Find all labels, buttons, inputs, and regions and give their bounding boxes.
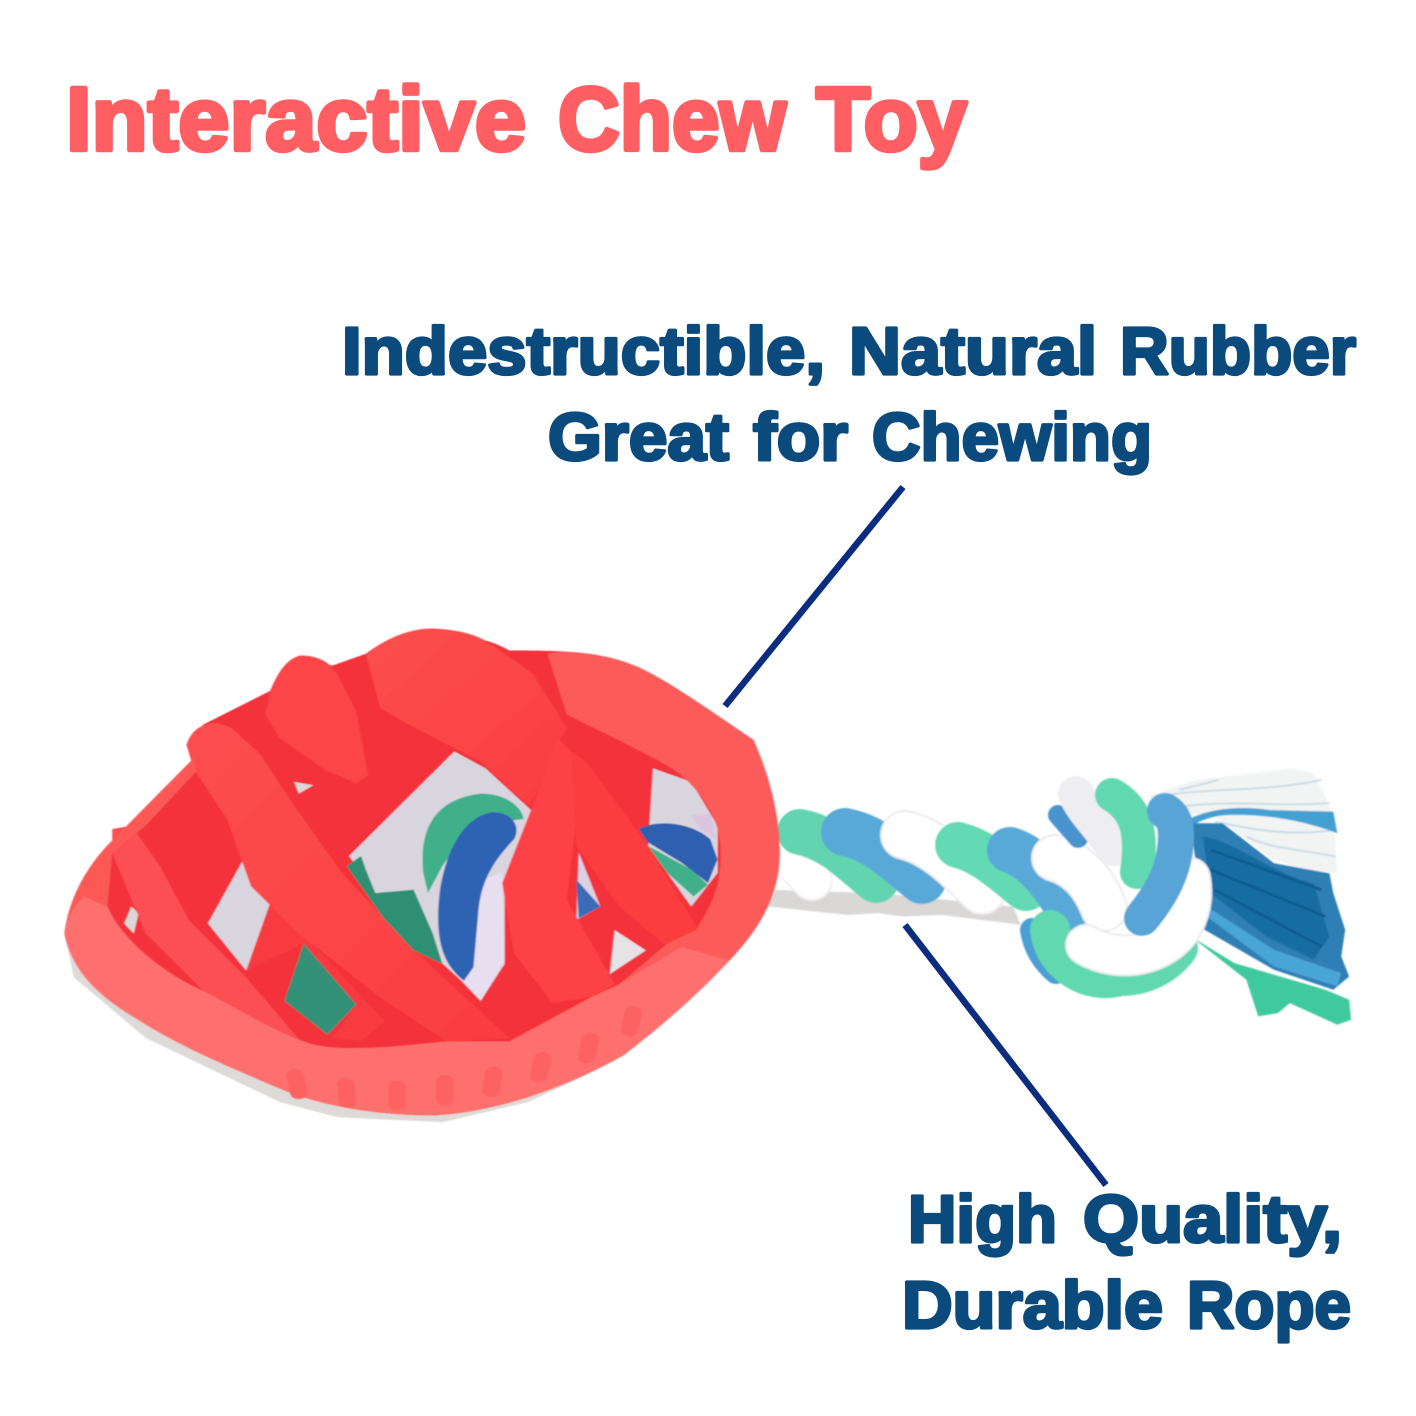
lobe: small <box>265 655 368 784</box>
illustration: rope <box>768 768 1351 1025</box>
title: Toy <box>816 70 967 170</box>
title <box>66 70 967 170</box>
rib: far left <box>112 826 304 1045</box>
inner rope: blue strand <box>438 812 517 981</box>
rim: bottom <box>64 896 729 1116</box>
callout: durable rope: Rope <box>1187 1268 1351 1343</box>
callout: natural rubber: Great <box>548 400 729 475</box>
callout: natural rubber: Rubber <box>1120 314 1356 389</box>
inner rope: right blue strand <box>639 823 718 883</box>
inner rope: green fringe <box>347 856 442 964</box>
rib: centre left <box>186 723 509 1041</box>
window: lower right <box>610 930 646 974</box>
rib: right <box>572 752 698 947</box>
callout: natural rubber: Natural <box>849 314 1097 389</box>
light blue strand <box>1185 808 1337 833</box>
window: right <box>648 768 718 907</box>
lobe: big <box>366 629 567 805</box>
twisted rope strands <box>790 832 1104 908</box>
illustration: rubber toy <box>64 629 780 1122</box>
toy body <box>64 634 780 1116</box>
callout: natural rubber: Indestructible, <box>342 314 825 389</box>
callout: durable rope <box>902 1182 1351 1343</box>
green fringe <box>1191 936 1351 1025</box>
rim: upper left edge <box>64 758 196 947</box>
bumps <box>285 1005 643 1110</box>
inner rope: green strand <box>423 794 524 893</box>
dark blue fringe <box>1191 823 1349 990</box>
callout: natural rubber <box>342 314 1356 475</box>
callout: durable rope: High <box>908 1182 1057 1257</box>
rib: centre <box>502 738 615 1003</box>
rim: right <box>548 652 780 1014</box>
rope shadow and fringe <box>768 768 1351 1025</box>
window: centre <box>349 752 533 1001</box>
callout: durable rope: Durable <box>902 1268 1163 1343</box>
knot strands <box>1032 794 1191 978</box>
inner strips <box>246 890 385 1041</box>
title: Interactive <box>66 70 526 170</box>
inner rope: white strand <box>462 873 505 1001</box>
title: Chew <box>558 70 787 170</box>
window: left <box>208 846 275 971</box>
rope shadow <box>768 890 1021 925</box>
window: small holes <box>124 782 313 934</box>
toy shadow <box>64 934 600 1122</box>
ribs <box>112 629 698 1045</box>
callout: durable rope: Quality, <box>1083 1182 1342 1257</box>
white fringe <box>1147 768 1337 873</box>
window: middle <box>576 853 600 920</box>
arrow: line to rubber toy <box>725 487 903 706</box>
callout: natural rubber: Chewing <box>872 400 1152 475</box>
arrow: line to rope <box>905 925 1106 1185</box>
callout: natural rubber: for <box>753 400 848 475</box>
window: lower green fringe <box>284 944 356 1035</box>
